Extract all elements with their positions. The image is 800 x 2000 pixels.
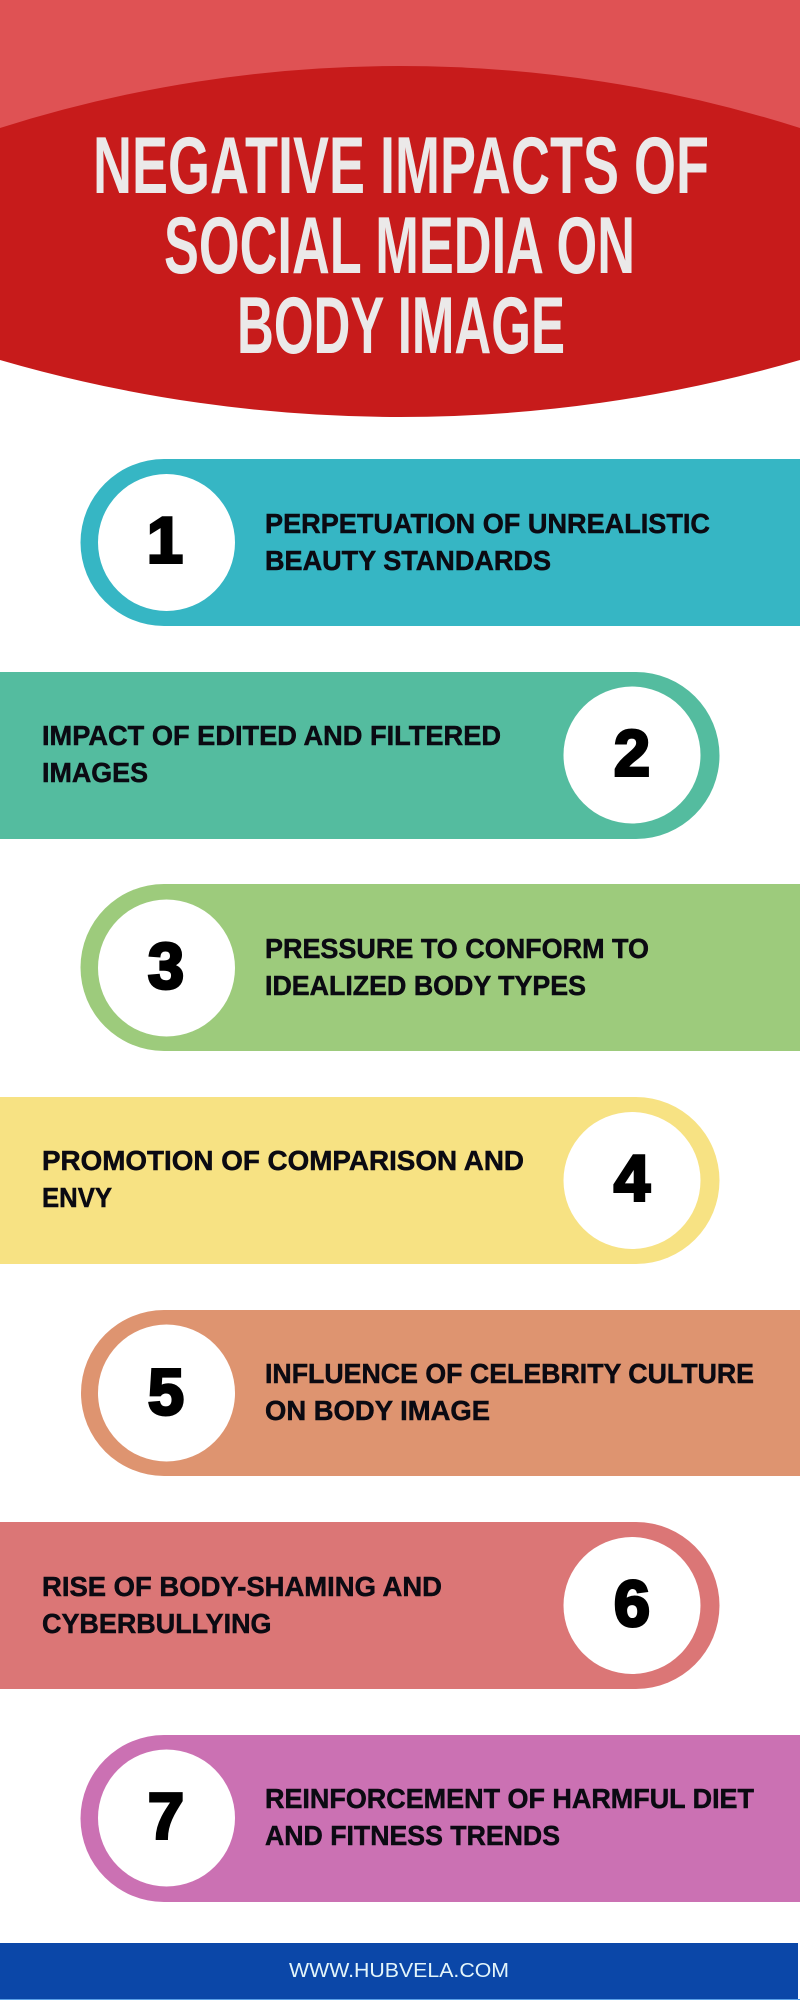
panel: item 4 [0, 1097, 720, 1264]
number badge 4 [564, 1112, 700, 1249]
text: item 1: BEAUTY STANDARDS [265, 545, 551, 576]
text: item 4: ENVY [42, 1182, 112, 1213]
text: item 3: IDEALIZED BODY TYPES [265, 970, 586, 1001]
footer website text: WWW.HUBVELA.COM [289, 1959, 509, 1982]
number badge 7: 7 [148, 1780, 184, 1852]
panel: item 7 [81, 1735, 800, 1902]
text: item 4 [42, 1145, 524, 1213]
panel: item 2 [0, 672, 720, 839]
text: item 3: PRESSURE TO CONFORM TO [265, 933, 649, 964]
number badge 3 [98, 900, 235, 1036]
panel: item 6 [0, 1522, 720, 1689]
text: item 1: PERPETUATION OF UNREALISTIC [265, 508, 710, 539]
text: item 2: IMAGES [42, 757, 148, 788]
text: item 6 [42, 1571, 442, 1639]
text: item 2 [42, 720, 501, 788]
text: item 5: INFLUENCE OF CELEBRITY CULTURE [265, 1358, 754, 1389]
text: item 7: REINFORCEMENT OF HARMFUL DIET [265, 1783, 754, 1814]
number badge 1 [98, 474, 235, 611]
text: item 1 [265, 508, 710, 576]
number badge 4: 4 [614, 1142, 650, 1214]
text: item 7: AND FITNESS TRENDS [265, 1820, 560, 1851]
text: item 7 [265, 1783, 754, 1851]
text: item 5 [265, 1358, 754, 1426]
number badge 7 [98, 1750, 235, 1886]
number badge 5: 5 [148, 1356, 184, 1428]
footer bar [0, 1943, 800, 2000]
number badge 6: 6 [614, 1567, 650, 1640]
title [93, 121, 709, 371]
panel: item 3 [81, 884, 800, 1051]
header band [0, 0, 800, 135]
text: item 6: CYBERBULLYING [42, 1608, 272, 1639]
text: item 5: ON BODY IMAGE [265, 1395, 490, 1426]
panel: item 5 [81, 1310, 800, 1476]
panel: item 1 [81, 459, 800, 626]
number badge 3: 3 [148, 930, 184, 1002]
number badge 6 [564, 1537, 700, 1674]
text: item 2: IMPACT OF EDITED AND FILTERED [42, 720, 501, 751]
title: BODY IMAGE [237, 281, 565, 371]
text: item 4: PROMOTION OF COMPARISON AND [42, 1145, 524, 1176]
number badge 2 [564, 686, 700, 824]
header red lens shape [0, 66, 800, 417]
text: item 6: RISE OF BODY-SHAMING AND [42, 1571, 442, 1602]
number badge 5 [98, 1324, 235, 1462]
text: item 3 [265, 933, 649, 1001]
number badge 1: 1 [147, 504, 183, 576]
number badge 2: 2 [614, 716, 650, 790]
